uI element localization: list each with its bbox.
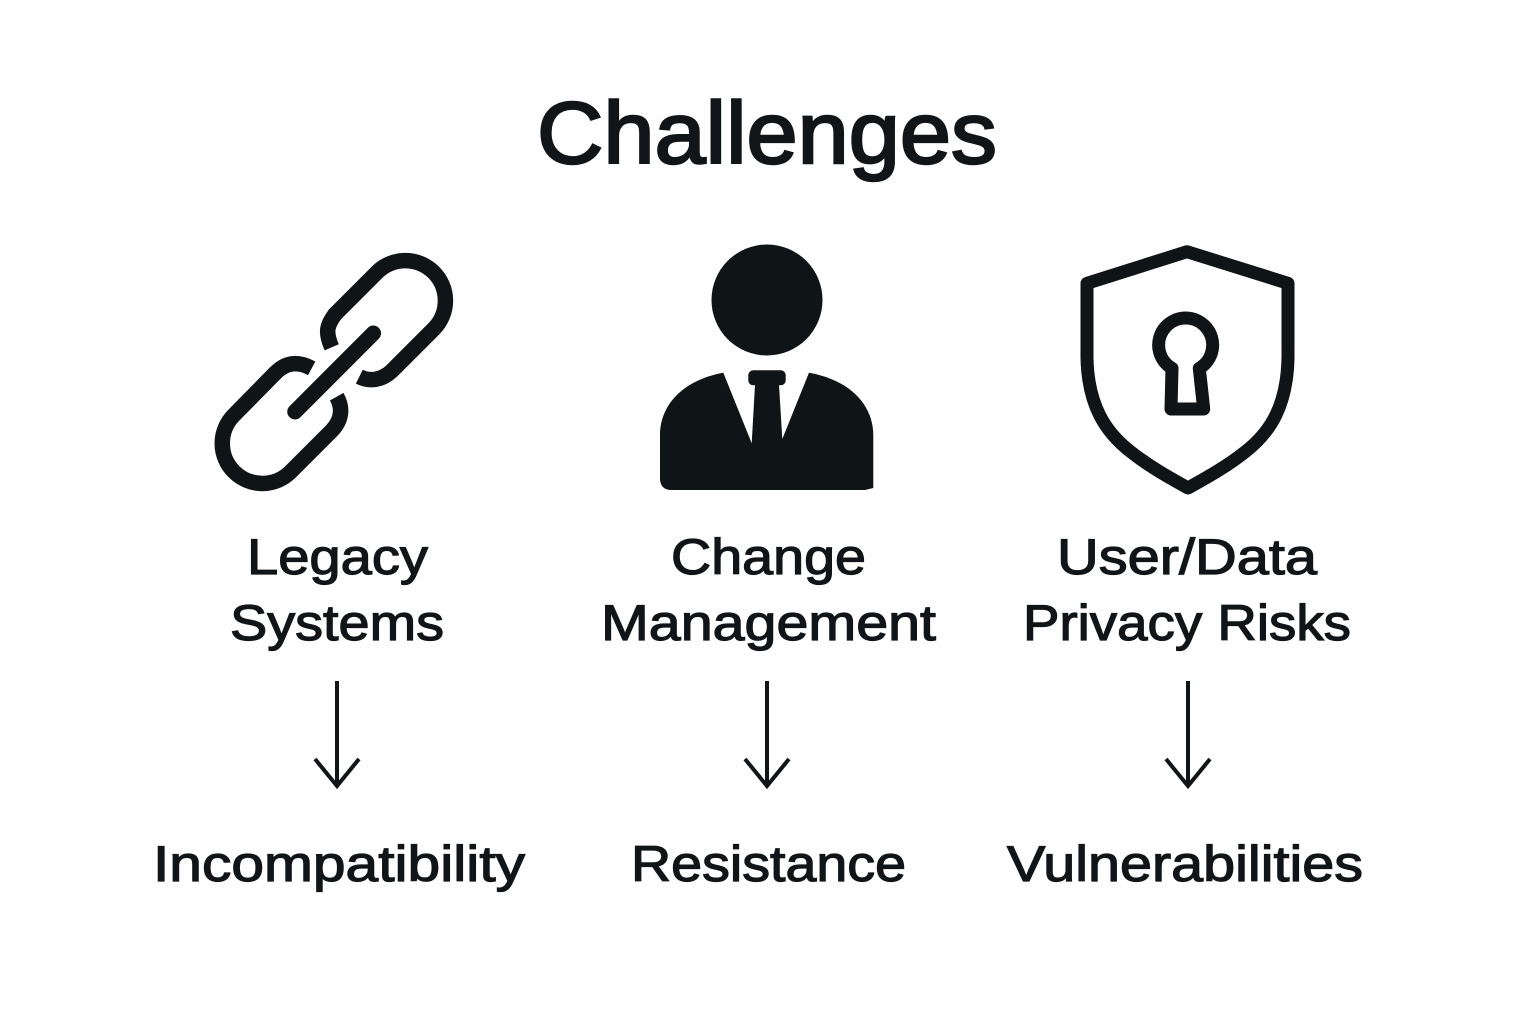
outcome: incompatibility: Incompatibility xyxy=(153,836,525,892)
label: change management xyxy=(601,529,936,651)
arrow xyxy=(745,681,789,786)
icon: person with tie xyxy=(660,244,873,490)
label: change management: Management xyxy=(601,595,936,651)
outcome: resistance: Resistance xyxy=(631,836,906,892)
column: change management xyxy=(601,244,936,892)
label: user/data privacy risks: Privacy Risks xyxy=(1023,595,1351,651)
icon: chain link xyxy=(222,261,445,483)
label: legacy systems: Systems xyxy=(230,595,444,651)
icon: shield with keyhole xyxy=(1087,252,1288,488)
column: user/data privacy risks xyxy=(1007,252,1363,892)
label: user/data privacy risks: User/Data xyxy=(1057,529,1317,585)
arrow xyxy=(1166,681,1210,786)
title: Challenges xyxy=(537,85,997,182)
outcome: vulnerabilities: Vulnerabilities xyxy=(1007,836,1363,892)
label: legacy systems xyxy=(230,529,444,651)
label: change management: Change xyxy=(671,529,866,585)
label: user/data privacy risks xyxy=(1023,529,1351,651)
arrow xyxy=(315,681,359,786)
column: legacy systems xyxy=(153,261,525,892)
label: legacy systems: Legacy xyxy=(247,529,428,585)
